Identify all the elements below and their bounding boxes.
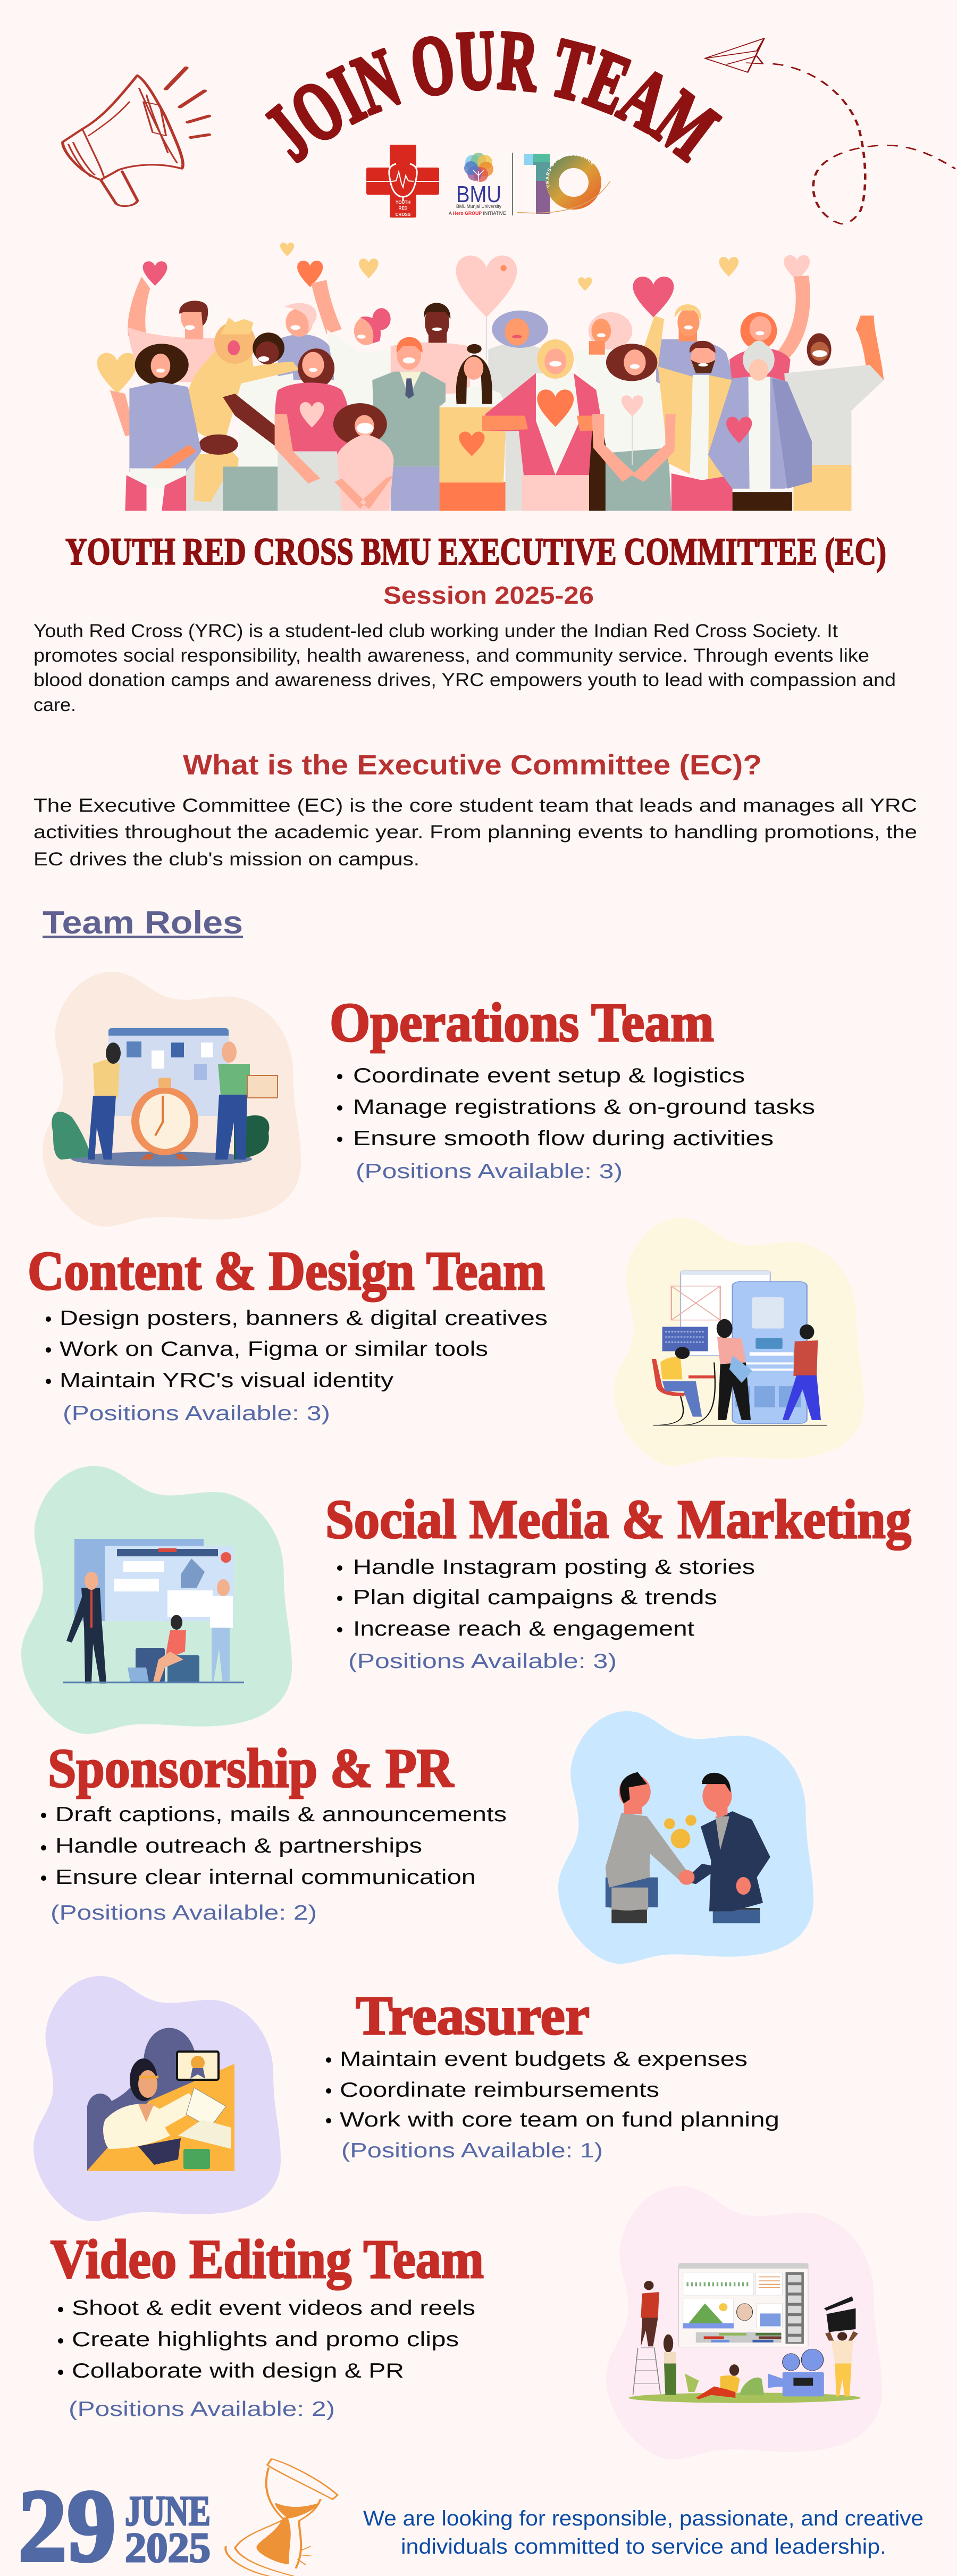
back row people [128,276,884,511]
blob [33,1976,281,2221]
date: 29 June 2025: 2025 [125,2525,211,2571]
positions: (Positions Available: 2) [51,1902,317,1924]
logo: BMU: A Hero GROUP INITIATIVE [449,211,506,216]
text block: closing message: We are looking for responsible, passionate, and creative [363,2507,924,2530]
blob [43,972,301,1227]
blob [558,1711,813,1964]
date: 29 June 2025: JUNE [125,2488,211,2535]
bullet list: Draft captions, mails & announcements [55,1803,507,1826]
positions: (Positions Available: 3) [63,1402,330,1425]
heading: session: Session 2025-26 [383,581,594,609]
bullet list: Maintain event budgets & expenses [340,2048,748,2071]
positions: (Positions Available: 3) [356,1160,623,1183]
logo: BMU: BML Munjal University [456,204,501,209]
blob [21,1466,292,1734]
text block: about YRC: Youth Red Cross (YRC) is a student-led club working under the Indian Red Cross Society. It [33,621,838,641]
text block: about YRC: promotes social responsibility, health awareness, and community service. Through events like [33,645,869,666]
bullet list: Manage registrations & on-ground tasks [353,1096,815,1119]
logo: 10 years of excellence [512,152,611,215]
bullet list: Shoot & edit event videos and reels [72,2297,475,2320]
panel: treasurer [33,1976,779,2221]
text block: about EC [33,795,917,870]
bullet list: Increase reach & engagement [353,1618,694,1640]
text block: about EC: activities throughout the academic year. From planning events to handling promotions, the [33,822,917,843]
bullet list [326,2048,779,2131]
positions: (Positions Available: 1) [341,2139,603,2162]
date: 29 June 2025 [18,2469,211,2576]
logo: youth red cross: RED [399,206,408,211]
front row people [110,332,812,511]
illustration: handshake with coins [606,1772,770,1923]
logo: youth red cross: CROSS [396,212,411,217]
panel: content and design team [28,1218,864,1466]
text block: about YRC: care. [33,695,76,715]
logo: youth red cross: YOUTH [396,200,410,205]
text block: closing message [363,2507,924,2558]
panel: social media and marketing [21,1466,911,1734]
bullet list [337,1064,815,1150]
bullet list: Ensure smooth flow during activities [353,1127,774,1150]
text block: about YRC [33,621,896,715]
heading: Sponsorship & PR [48,1738,455,1799]
positions: (Positions Available: 3) [348,1650,617,1673]
heading: team roles: Team Roles [43,905,243,940]
bullet list: Collaborate with design & PR [72,2360,404,2382]
bullet list: Coordinate event setup & logistics [353,1064,745,1087]
icon: paper plane and dashed path [705,38,955,224]
panel: operations team [43,972,815,1227]
bullet list: Ensure clear internal communication [55,1866,476,1889]
icon: megaphone [63,68,209,206]
positions: (Positions Available: 2) [69,2398,335,2421]
text block: about EC: EC drives the club's mission on campus. [33,849,419,870]
bullet list [337,1556,755,1640]
logo: BMU [449,153,506,216]
logo: 10 years of excellence: YEARS OF EXCELLENCE [545,152,594,188]
floating hearts [97,243,810,394]
text block: about EC: The Executive Committee (EC) is the core student team that leads and manages all YRC [33,795,917,816]
logo: youth red cross [366,145,439,218]
heading: Social Media & Marketing [325,1489,911,1550]
bullet list [41,1803,507,1889]
bullet list: Work on Canva, Figma or similar tools [60,1338,488,1361]
heading: Video Editing Team [51,2229,484,2290]
dog [184,318,299,511]
panel: sponsorship and PR [41,1711,813,1964]
title: join our team: JOIN OUR TEAM [265,31,723,164]
blob [614,1218,864,1466]
illustration: team at board with clock [52,1028,278,1166]
illustration: treasurer at desk [87,2028,234,2171]
heading: what is the EC: What is the Executive Committee (EC)? [183,749,762,781]
bullet list: Create highlights and promo clips [72,2328,459,2351]
panel: video editing team [51,2186,882,2460]
logo: BMU: BMU [456,181,501,207]
illustration: crowd of people with hearts [97,243,884,511]
heading: Operations Team [330,992,714,1053]
heading: Content & Design Team [28,1240,545,1302]
icon: hourglass [225,2459,338,2576]
bullet list: Work with core team on fund planning [340,2108,779,2131]
bullet list: Handle Instagram posting & stories [353,1556,755,1579]
bullet list: Coordinate reimbursements [340,2079,659,2102]
bullet list: Handle outreach & partnerships [55,1835,422,1857]
illustration: designers with wireframes [652,1271,827,1425]
text block: closing message: individuals committed to service and leadership. [401,2535,886,2558]
heading: Treasurer [356,1985,590,2046]
bullet list: Plan digital campaigns & trends [353,1586,717,1609]
illustration: team at social media board [63,1539,244,1683]
blob [606,2186,882,2460]
bullet list [46,1307,548,1392]
bullet list [58,2297,475,2382]
text block: about YRC: blood donation camps and awareness drives, YRC empowers youth to lead with compassion and [33,670,896,690]
bullet list: Maintain YRC's visual identity [60,1369,394,1392]
illustration: video production [628,2263,861,2403]
bullet list: Design posters, banners & digital creatives [60,1307,548,1330]
